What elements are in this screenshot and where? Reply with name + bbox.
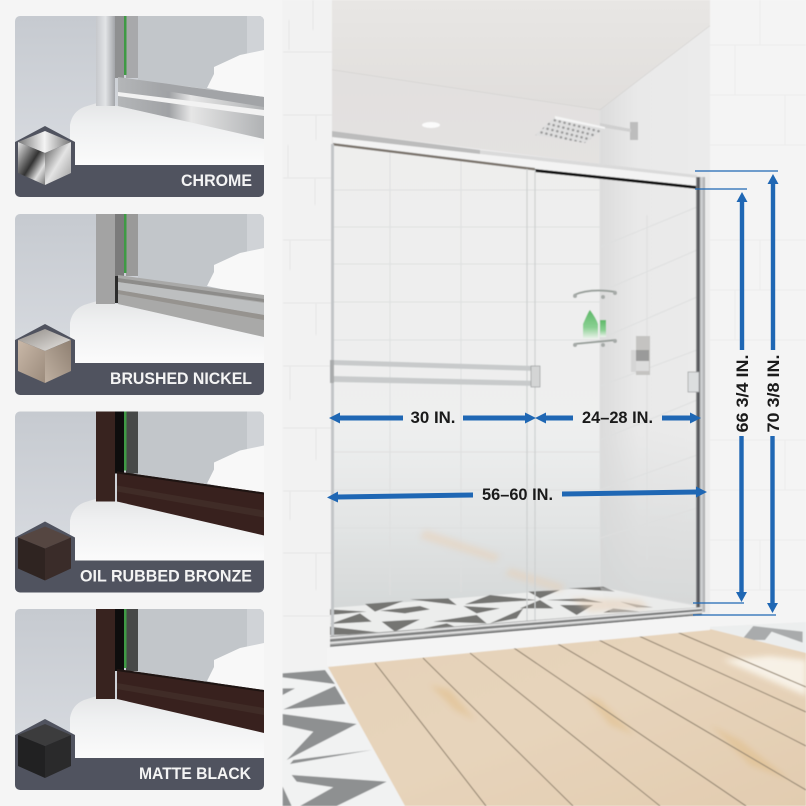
floor: right tile	[706, 622, 806, 660]
icon: bronze cube	[15, 522, 75, 586]
chrome door frame	[96, 16, 264, 139]
ceiling	[332, 0, 710, 110]
label bar	[15, 165, 264, 197]
panel: oil rubbed bronze finish	[15, 412, 264, 592]
right wall	[600, 26, 710, 620]
shower valve	[631, 336, 650, 375]
panel: matte black finish	[15, 609, 264, 790]
back wall	[332, 70, 600, 640]
icon: chrome cube	[15, 126, 75, 190]
dimension: 70 3/8 in height: 70 3/8 IN.	[765, 354, 783, 432]
dimension: 30 in width	[329, 409, 536, 427]
shower head	[535, 116, 638, 143]
panel: chrome finish	[15, 16, 264, 197]
bottom rail	[330, 607, 702, 647]
wall tile lines	[333, 110, 697, 595]
label: brushed nickel: BRUSHED NICKEL	[110, 370, 252, 388]
shower room scene	[282, 0, 806, 806]
glass reflections	[420, 530, 650, 612]
label: matte black: MATTE BLACK	[139, 765, 251, 783]
shower floor tile	[330, 587, 700, 640]
door hinge	[688, 372, 699, 392]
white curb	[327, 615, 710, 666]
matte black door frame	[96, 609, 264, 733]
label: oil rubbed bronze: OIL RUBBED BRONZE	[80, 568, 252, 586]
dimension: 24-28 in width	[535, 409, 701, 427]
label: chrome: CHROME	[181, 172, 252, 190]
panel: brushed nickel finish	[15, 214, 264, 395]
ceiling light	[422, 122, 440, 128]
left brick pillar	[282, 0, 332, 672]
floor: wood planks	[328, 629, 806, 806]
icon: brushed nickel cube	[15, 324, 75, 388]
brushed nickel door frame	[96, 214, 264, 337]
label bar	[15, 560, 264, 592]
dimension: 24-28 in width: 24–28 IN.	[582, 409, 653, 427]
towel bar handle	[330, 360, 540, 387]
shower door: right jamb	[696, 177, 705, 612]
icon: matte black cube	[15, 719, 75, 783]
corner shelves and bottles	[573, 291, 617, 347]
right brick pillar	[710, 0, 806, 640]
dimension: 56-60 in width: 56–60 IN.	[482, 486, 553, 504]
bronze door frame	[96, 412, 264, 536]
floor: left tile	[282, 667, 405, 806]
shower door: left jamb	[331, 144, 334, 644]
dimension: 66 3/4 in height	[693, 189, 752, 603]
dimension: 30 in width: 30 IN.	[410, 409, 456, 427]
dimension: 70 3/8 in height	[693, 171, 783, 615]
label bar	[15, 758, 264, 790]
dimension: 56-60 in width	[327, 486, 707, 504]
shower door: centre stile	[527, 169, 535, 628]
dimension: 66 3/4 in height: 66 3/4 IN.	[734, 354, 752, 432]
shower door: top rail	[332, 131, 697, 189]
label bar	[15, 363, 264, 395]
